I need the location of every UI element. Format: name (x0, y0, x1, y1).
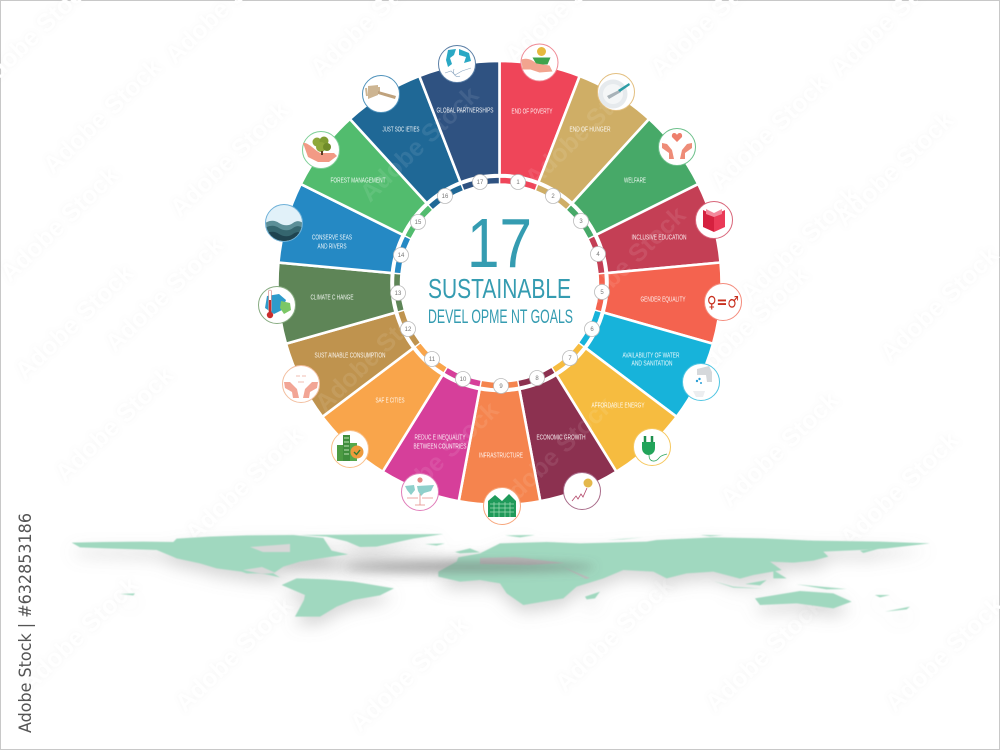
icon: plate and fork (598, 74, 634, 110)
icon: globe with thermometer (258, 286, 296, 324)
segment 2: end of hunger (533, 76, 654, 226)
watermark background: Adobe Stock (100, 231, 229, 357)
numbered bubbles: 11 (429, 357, 436, 363)
watermark background: Adobe Stock (550, 571, 679, 697)
icon: green plug (634, 428, 670, 466)
title: 17: 17 (467, 204, 532, 282)
numbered bubbles: 8 (535, 376, 539, 382)
centre disc (400, 184, 598, 382)
segment 17: global partnerships (419, 47, 541, 197)
segment 4: inclusive education: INCLUSIVE EDUCATION (632, 234, 686, 242)
segment 10: reduce inequality: REDUC E INEQUALITY (414, 434, 466, 442)
numbered bubbles: 1 (516, 180, 520, 186)
segment 14: conserve seas and rivers: CONSERVE SEAS (312, 234, 352, 242)
icon: red open book (696, 202, 732, 238)
central ground shadow (345, 562, 595, 572)
numbered bubbles: 3 (579, 219, 583, 225)
icon: city with check shield (332, 430, 368, 468)
watermark over wheel: Adobe Stock (490, 391, 619, 517)
segment 9: infrastructure (438, 374, 540, 516)
watermark credit: Adobe Stock | #632853186 (16, 513, 36, 733)
icon: gender equality symbols (704, 284, 742, 320)
watermark over wheel: Adobe Stock (520, 66, 649, 192)
segment 16: just societies: JUST SOC IETIES (382, 126, 420, 134)
segment 16: just societies (350, 65, 497, 215)
segment 7: affordable energy: AFFORDABLE ENERGY (592, 402, 645, 410)
numbered bubbles: 15 (415, 220, 422, 226)
segment 15: forest management (301, 112, 453, 242)
icon: hands with heart (658, 128, 696, 166)
icon: gavel (362, 76, 400, 112)
watermark background: Adobe Stock (38, 53, 167, 179)
segment 1: end of poverty: END OF POVERTY (512, 108, 553, 116)
numbered bubbles: 2 (551, 194, 555, 200)
segment 6: water and sanitation: AVAILABILITY OF WATER (622, 352, 680, 360)
watermark background: Adobe Stock (700, 591, 829, 717)
watermark background: Adobe Stock (830, 106, 959, 232)
segment 5: gender equality (591, 263, 728, 354)
watermark background: Adobe Stock (165, 96, 294, 222)
title: Sustainable: SUSTAINABLE (428, 273, 571, 304)
segment 13: climate change: CLIMATE C HANGE (310, 294, 354, 302)
segment 13: climate change (264, 231, 411, 344)
segment 9: infrastructure: INFRASTRUCTURE (479, 452, 523, 460)
segment 15: forest management: FOREST MANAGEMENT (330, 178, 386, 184)
segment 12: sustainable consumption (274, 275, 426, 417)
goal wheel (258, 44, 742, 524)
segment 14: conserve seas and rivers (278, 183, 415, 274)
segment 6: water and sanitation (566, 308, 713, 421)
watermark background: Adobe Stock (685, 261, 814, 387)
numbered bubbles: 9 (499, 384, 503, 390)
watermark over wheel: Adobe Stock (562, 201, 691, 327)
segment 3: welfare (562, 119, 708, 269)
segment 3: welfare: WELFARE (624, 178, 646, 184)
icon: hand with coin and bowl (521, 44, 558, 81)
icon: globe and handshake (438, 46, 476, 82)
watermark background: Adobe Stock (735, 181, 864, 307)
numbered bubbles: 6 (590, 327, 594, 333)
segment 12: sustainable consumption: SUST AINABLE CONSUMPTION (314, 352, 386, 360)
segment 8: economic growth (480, 361, 616, 514)
segment 11: safe cities (314, 319, 451, 472)
segment 2: end of hunger: END OF HUNGER (570, 126, 610, 134)
segment 14: conserve seas and rivers: AND RIVERS (318, 244, 347, 250)
numbered bubbles: 13 (395, 291, 402, 297)
icon: green buildings (484, 488, 520, 524)
title: Development Goals: DEVEL OPME NT GOALS (428, 306, 573, 328)
icon: growth line with balloon (564, 472, 600, 510)
segment 6: water and sanitation: AND SANITATION (632, 360, 672, 368)
numbered bubbles: 14 (398, 253, 405, 259)
segment 11: safe cities: SAF E CITIES (376, 398, 405, 404)
numbered bubbles: 5 (600, 290, 604, 296)
segment 10: reduce inequality: BETWEEN COUNTRIES (414, 444, 467, 450)
numbered bubbles (390, 174, 610, 394)
watermark background: Adobe Stock (835, 426, 964, 552)
icon: water waves (265, 204, 303, 242)
watermark over wheel: Adobe Stock (310, 291, 439, 417)
numbered bubbles: 12 (405, 327, 412, 333)
segment 17: global partnerships: GLOBAL PARTNERSHIPS (436, 108, 494, 114)
segment 4: inclusive education (582, 184, 734, 314)
watermark background: Adobe Stock (170, 591, 299, 717)
segment 10: reduce inequality (380, 359, 483, 501)
icon: gender equality symbols: ♀=♂ (707, 292, 739, 312)
watermark over wheel (310, 66, 691, 522)
watermark background: Adobe Stock (180, 421, 309, 547)
watermark background: Adobe Stock (345, 611, 474, 737)
numbered bubbles: 4 (596, 252, 600, 258)
segment 1: end of poverty (500, 61, 580, 191)
watermark background: Adobe Stock (15, 571, 144, 697)
world map with shadow (72, 534, 930, 625)
numbered bubbles: 17 (477, 180, 484, 186)
watermark over wheel: Adobe Stock (375, 396, 504, 522)
watermark background: Adobe Stock (715, 386, 844, 512)
watermark background: Adobe Stock (10, 259, 139, 385)
numbered bubbles: 7 (568, 356, 572, 362)
icon: world map with scales (402, 474, 438, 510)
watermark background: Adobe Stock (50, 361, 179, 487)
segment 5: gender equality: GENDER EQUALITY (640, 296, 686, 304)
icon: open hands (282, 366, 320, 402)
icon: hand with tree (302, 132, 340, 168)
segment 7: affordable energy (525, 339, 677, 481)
icon: water tap (682, 364, 720, 400)
watermark background: Adobe Stock (705, 69, 834, 195)
numbered bubbles: 10 (460, 377, 467, 383)
hudson bay and inland seas (243, 544, 590, 579)
watermark over wheel: Adobe Stock (355, 81, 484, 207)
segment 8: economic growth: ECONOMIC GROWTH (536, 434, 586, 442)
numbered bubbles: 16 (442, 194, 449, 200)
